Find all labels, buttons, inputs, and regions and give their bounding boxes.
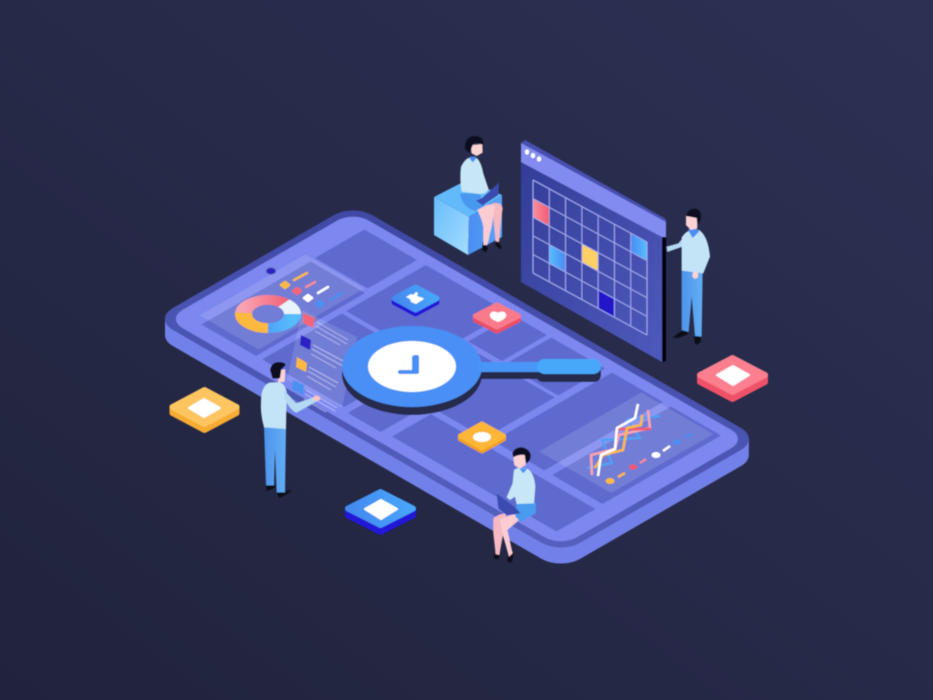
arm [667,237,684,252]
window top edge [521,140,666,224]
screen panels [197,230,722,532]
window title bar [521,143,666,237]
torso [507,468,535,504]
far leg [493,513,507,555]
list sheet [287,310,357,408]
magnifier [342,326,601,415]
phone screen [167,212,747,546]
head [471,144,483,156]
clock hands [398,355,419,374]
shoes [482,239,501,253]
woman on phone edge [493,447,536,563]
shoes [673,331,701,345]
collar [688,229,699,238]
donut chart [244,300,292,328]
torso [460,157,489,194]
near leg [500,515,518,557]
man by window [667,209,710,345]
hair [512,447,531,463]
shoes [265,483,292,498]
head [513,454,526,469]
highlighted cells [533,199,549,226]
clock face [368,341,456,392]
window dots [525,149,541,162]
skirt [515,503,536,522]
hand [692,271,698,279]
donut legend [281,273,342,307]
icon: thumbs up tile [394,287,437,314]
chart legend [606,434,692,484]
near leg [477,205,495,245]
line chart [587,404,660,476]
laptop [476,183,499,205]
tile: yellow [172,390,236,430]
hair [686,209,701,225]
phone [154,204,760,570]
magnifier handle [478,362,542,372]
calendar grid [533,180,647,335]
icon: message tile [460,424,504,451]
cube seat [434,180,502,255]
floating list card [287,310,357,412]
man at list [261,362,320,498]
skirt [460,193,485,211]
illustration [154,136,765,570]
laptop [497,493,521,515]
icon: heart tile [476,305,518,331]
far leg [492,203,503,242]
list icons [303,313,315,328]
collar [469,157,477,162]
tile: blue [348,492,413,532]
hand [313,396,320,401]
arm [284,390,318,413]
collar [519,468,527,473]
phone rim [154,204,760,554]
donut card overlay [200,254,364,350]
woman on cube [460,136,503,253]
magnifier shadow [342,334,601,415]
window side [662,237,666,362]
hair [270,362,286,379]
chart card overlay [539,392,713,493]
grid lines [533,180,647,335]
trousers [264,427,286,492]
torso [682,230,710,273]
phone side edge [154,205,760,570]
trousers [682,268,703,337]
torso [261,382,287,429]
camera dot [266,268,276,274]
head [278,369,285,383]
tile: red [700,358,765,399]
shoes [494,548,514,563]
head [686,216,697,230]
window body [521,160,662,362]
magnifier lens [342,326,482,407]
calendar window [521,140,666,362]
list text lines [304,322,348,412]
hair [465,136,483,153]
